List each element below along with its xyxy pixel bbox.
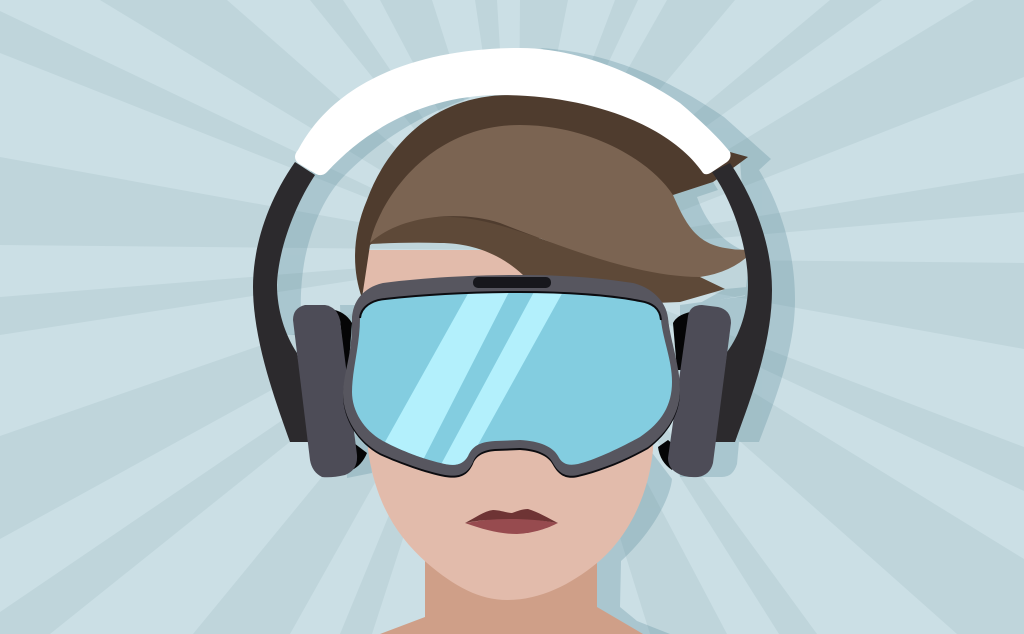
shadow: along hair edge [673,182,742,250]
shadow: behind left ear cup [340,305,372,478]
goggles: black lower rim [343,277,680,478]
shadow: inner left headband [277,90,470,335]
shadow: under hair tip [700,287,747,303]
goggles: lens highlights [385,290,564,470]
hair: front darker lock [370,217,725,303]
cast shadow of head and headphones [277,48,795,634]
VR goggles [343,275,680,478]
neck [380,560,643,634]
headband: right dark arm [712,163,772,442]
right ear cup back [658,312,690,470]
left ear cup [293,305,357,477]
lips [465,509,558,534]
lower lip [465,516,558,534]
goggles: black line above lens [360,292,661,320]
hair: main sweep [370,125,755,277]
right ear cup [668,305,731,477]
face [362,250,655,600]
goggles: lens [352,292,672,465]
left ear cup back [330,309,367,470]
upper lip [465,509,558,523]
hair: back dark layer [355,95,748,298]
shadow: face and neck [590,450,672,634]
headband: white padded top [295,48,731,175]
headband: left dark arm [253,162,315,442]
goggles: frame [343,275,680,476]
shadow: outer headband, right arm and ear cup [540,48,795,477]
goggles: top slot [473,277,551,288]
